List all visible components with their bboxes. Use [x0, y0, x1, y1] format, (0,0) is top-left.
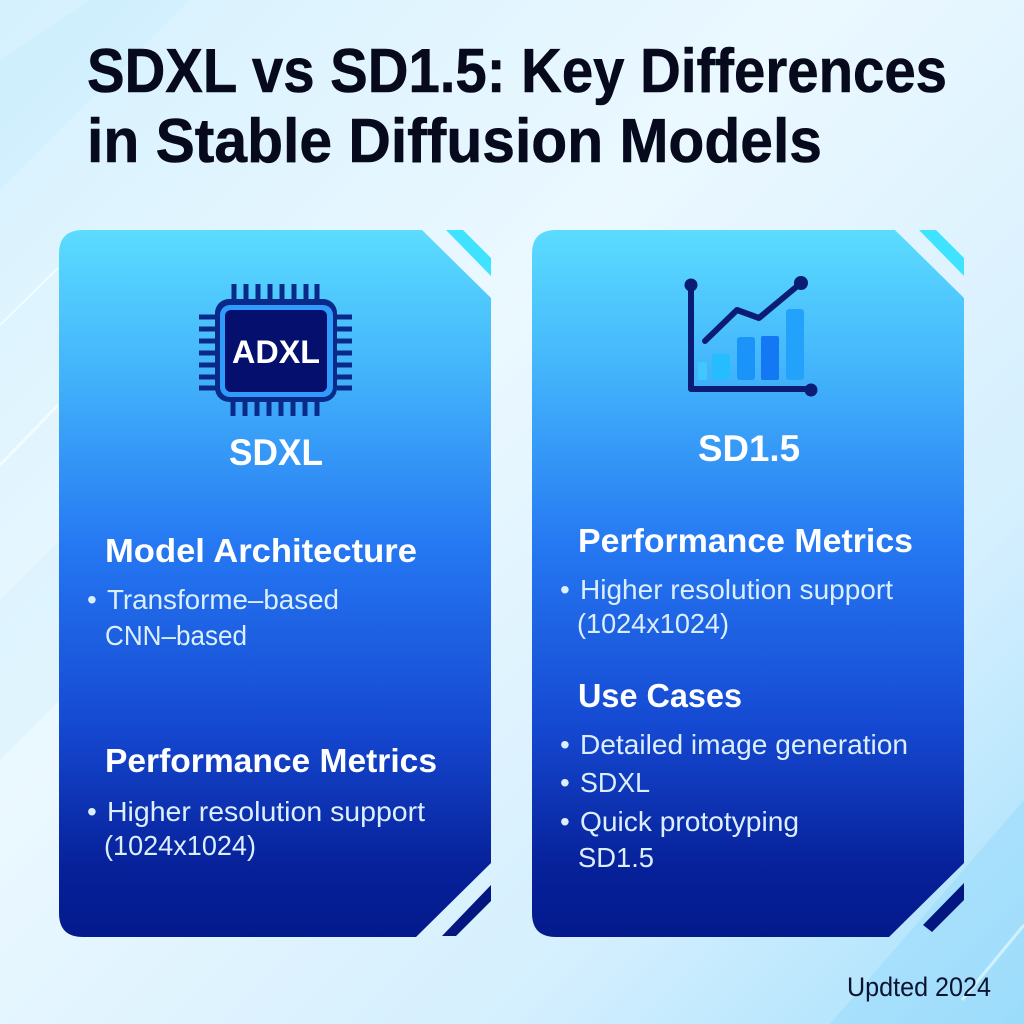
panel background: SDXL: [59, 230, 491, 937]
section: use cases: Use Cases: [578, 677, 742, 714]
panel: SDXL: [59, 230, 491, 937]
section: use cases: •: [560, 767, 570, 798]
icon: chart: [684, 276, 818, 396]
section: model architecture: [87, 532, 417, 651]
accent: top right corner: [919, 230, 964, 276]
section: performance metrics: (1024x1024): [104, 830, 256, 861]
section: model architecture: Transforme–based: [107, 584, 339, 615]
section: use cases: SDXL: [580, 767, 650, 798]
section: use cases: •: [560, 806, 570, 837]
section: performance metrics: Performance Metrics: [578, 522, 913, 559]
title: SDXL vs SD1.5: Key Differences: [87, 37, 947, 106]
section: use cases: Detailed image generation: [580, 729, 908, 760]
section: model architecture: CNN–based: [105, 620, 247, 651]
section: model architecture: •: [87, 584, 97, 615]
title: [87, 37, 947, 176]
panel: SD1.5: [532, 230, 964, 937]
heading: SD1.5: SD1.5: [698, 428, 800, 469]
section: performance metrics: Performance Metrics: [105, 742, 437, 779]
section: performance metrics: Higher resolution support: [107, 796, 425, 827]
icon: chip: [199, 284, 352, 416]
section: performance metrics: [87, 742, 437, 861]
section: use cases: [560, 677, 908, 873]
accent: bottom right corner: [923, 883, 964, 932]
section: model architecture: Model Architecture: [105, 532, 417, 569]
title: in Stable Diffusion Models: [87, 107, 822, 176]
footer note: Updted 2024: [847, 972, 991, 1002]
chip label: ADXL: [232, 334, 320, 370]
section: performance metrics: •: [87, 796, 97, 827]
section: performance metrics: [560, 522, 913, 639]
section: use cases: SD1.5: [578, 842, 654, 873]
panel background: SD1.5: [532, 230, 964, 937]
section: use cases: •: [560, 729, 570, 760]
section: performance metrics: (1024x1024): [577, 608, 729, 639]
accent: bottom right corner: [442, 885, 491, 936]
section: use cases: Quick prototyping: [580, 806, 799, 837]
section: performance metrics: Higher resolution support: [580, 574, 893, 605]
heading: SDXL: SDXL: [229, 432, 323, 473]
accent: top right corner: [446, 230, 491, 276]
section: performance metrics: •: [560, 574, 570, 605]
